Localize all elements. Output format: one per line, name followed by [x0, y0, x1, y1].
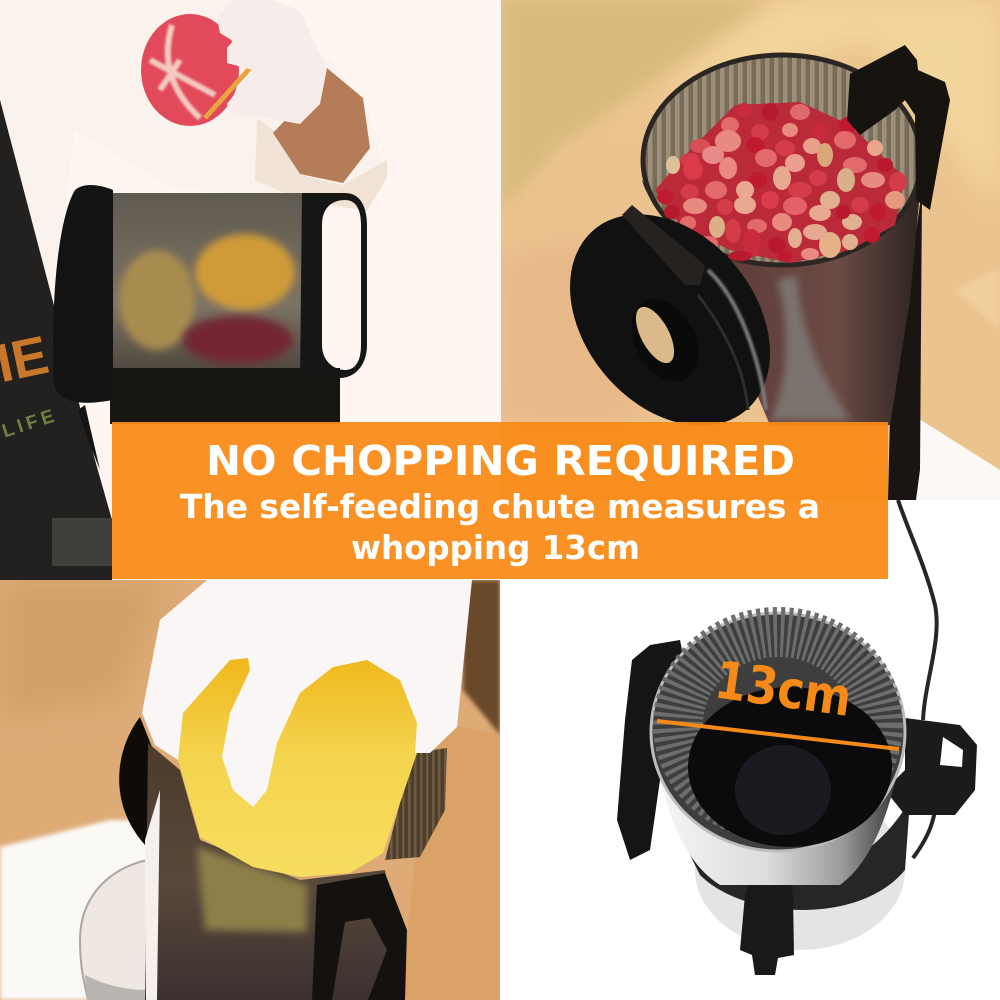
measurement line [657, 721, 899, 749]
chef's white shirt and sleeve [0, 0, 387, 296]
pomegranate seeds [655, 102, 907, 263]
apron logo: LIFE [0, 405, 61, 442]
juicer chute [119, 717, 447, 1000]
chamber [651, 613, 905, 885]
banner subheading [180, 487, 820, 567]
pineapple [178, 658, 417, 877]
chute body [642, 55, 922, 500]
black handle [847, 45, 950, 210]
spout [740, 857, 794, 975]
forearm [273, 68, 370, 183]
handle [885, 718, 977, 815]
juicer chute [52, 185, 367, 566]
open lid [617, 640, 683, 860]
gloved hand [217, 0, 327, 124]
banner heading: NO CHOPPING REQUIRED [206, 437, 795, 485]
power cord [898, 500, 938, 858]
photo: pomegranate seeds in open chute [501, 0, 1000, 500]
white glove [142, 580, 472, 807]
photo: hand adding grapefruit to juicer chute [0, 0, 500, 580]
black apron [0, 100, 112, 580]
orange banner [112, 422, 888, 579]
glass jug [80, 860, 147, 1000]
base [680, 790, 910, 950]
measurement label: 13cm [711, 650, 855, 729]
banner subheading: whopping 13cm [351, 528, 640, 567]
grapefruit [141, 14, 250, 126]
apron logo [0, 336, 54, 438]
banner subheading: The self-feeding chute measures a [180, 487, 820, 526]
open lid [570, 205, 770, 426]
photo: pineapple pressed into chute [0, 580, 500, 1000]
photo: top view of chute with 13cm measure [500, 500, 1000, 1000]
